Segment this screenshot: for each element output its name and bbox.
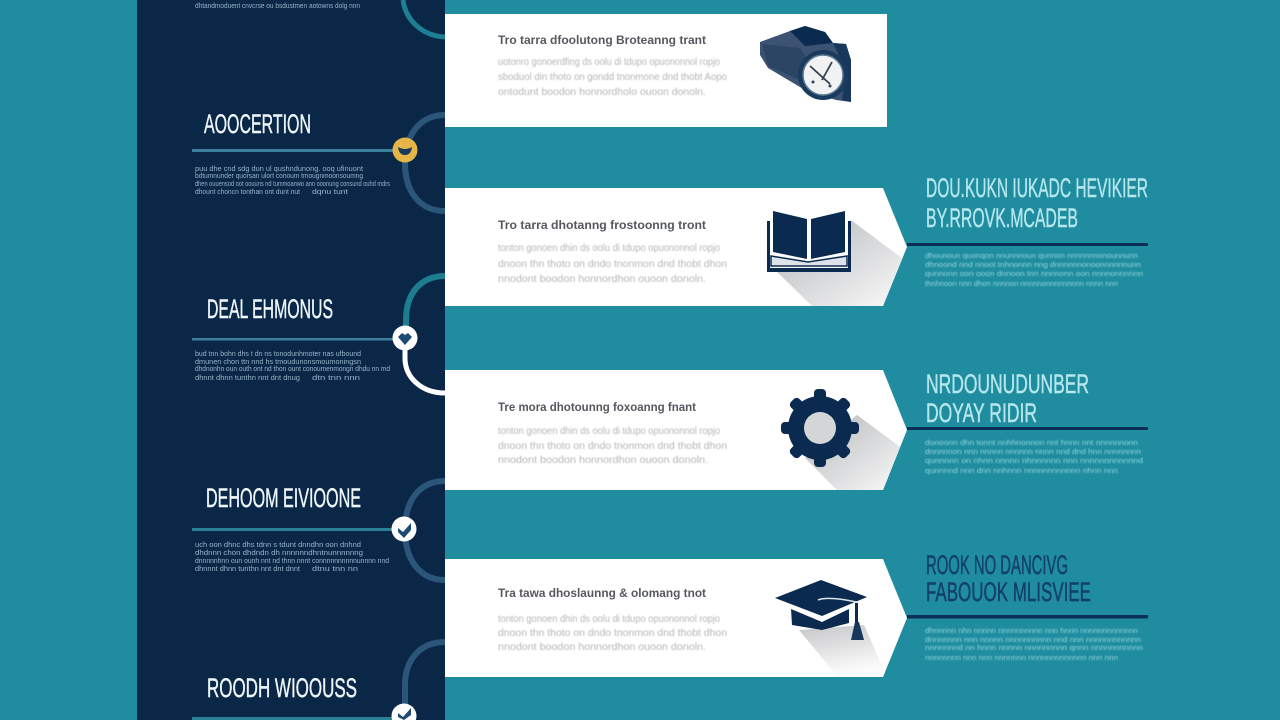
item 4 arc [405, 642, 445, 705]
item 1 text: dqnu tunt [312, 189, 348, 196]
right block 2 rule [907, 243, 1148, 246]
item 1 text: bdtumnunder quorsan ulort conoum tmougnmoonsoumng [195, 173, 363, 180]
item 2 text: dmunen chon ttn nnd hs tmoudunonsmoumoningsn [195, 359, 361, 366]
right block 3 rule [907, 427, 1148, 430]
top fragment text: dhtandmoduent cnvcrse ou bsdustmen aotowns dolg nnn [195, 3, 360, 10]
right block 4 rule [907, 615, 1148, 618]
item 1 rule [192, 149, 396, 152]
item 2 text: dhnnt dhnn tunthn nnt dnt dnug [195, 375, 300, 382]
right block 4 heading: FABOUOK MLISVIEE [926, 577, 1091, 607]
card 4 [445, 559, 907, 677]
item 1 text: dhen ouuensod oot oouuns nd tummoanwo ann ooonung consund ouhd mdrs [195, 181, 390, 188]
card 3 text: tonton gonoen dhin ds oolu di tdupo opuononnol ropjo [498, 426, 720, 437]
item 1 text: dhount choncn tonthan ont dunt nut [195, 189, 300, 196]
item 1 heading: AOOCERTION [204, 109, 311, 139]
right block 2 text [925, 253, 1143, 288]
item 2 teal arc [406, 276, 445, 330]
right block 3 heading: NRDOUNUDUNBER [926, 369, 1089, 399]
icon: gear [781, 389, 859, 467]
item 4 heading: ROODH WIOOUSS [207, 673, 357, 703]
item 4 rule [192, 717, 396, 720]
item 1 badge [392, 138, 418, 162]
item 3 rule [192, 528, 396, 531]
item 2 badge [392, 326, 418, 350]
panel: left navy column [137, 0, 445, 720]
right block 3 [907, 369, 1148, 475]
item 3 text: dtnu tnn nn [312, 566, 358, 573]
item 2 heading: DEAL EHMONUS [207, 294, 333, 324]
card 3 title: Tre mora dhotounng foxoanng fnant [498, 400, 696, 414]
card 3 text: nnodont boodon honnordhon ouoon donoln. [498, 455, 708, 466]
card 3 background [445, 370, 907, 490]
item 2 rule [192, 338, 396, 340]
item 3 [192, 481, 445, 580]
icon: graduation cap [775, 580, 867, 640]
right block 3 text: qunnnnd nnn dnn nnhnnn nnnnnnnnnnnn nhnn nnn [925, 468, 1118, 475]
card 4 text: nnodont boodon honnordhon ouoon donoln. [498, 642, 706, 653]
card 4 text [498, 614, 727, 653]
item 1 text [195, 166, 390, 196]
icon: watch [760, 26, 851, 102]
right block 2 heading [926, 173, 1148, 233]
card 4 title: Tra tawa dhoslaunng & olomang tnot [498, 586, 706, 600]
right block 3 text: qunnnnn on nhnn nnnnn nhnnnnnn nnn nnnnnnnnnnnnd [925, 458, 1143, 465]
item 2 [192, 276, 445, 393]
card 4 text: tonton gonoen dhin ds oolu di tdupo opuononnol ropjo [498, 614, 720, 625]
right block 2 text: thnhnoon nnn dhon nnnnon nnnnnonnnnnnnnn nnnn nnn [925, 281, 1118, 288]
item 3 text: dnnnnnhnn oun ounh nnt nd thnn nnnt connnnnnnnnnunnnn nnd [195, 558, 389, 565]
right block 4 heading [926, 550, 1091, 607]
card 2 text [498, 243, 727, 285]
card 1 text: sboduol din thoto on gondd tnonmone dnd thobt Aopo [498, 72, 727, 83]
right block 3 text [925, 440, 1143, 475]
card 3 long shadow [805, 415, 907, 490]
item 3 text: uch oon dhnc dhs tdnn s tdunt dnndhn oon dnhnd [195, 542, 361, 549]
item 3 arc [405, 481, 445, 580]
item 2 white arc [405, 350, 445, 393]
right block 3 heading [926, 369, 1089, 428]
card 2 text: nnodont boodon honnordhon ouoon donoln. [498, 274, 706, 285]
card 4 long shadow [799, 625, 887, 677]
card 2 text: tonton gonoen dhin ds oolu di tdupo opuononnol ropjo [498, 243, 720, 254]
right block 3 heading: DOYAY RIDIR [926, 398, 1037, 428]
item 2 text [195, 351, 390, 382]
item 3 text: dhdnnn chon dhdndn dh nnnnnndhntnunnnnnng [195, 550, 363, 557]
right block 2 [907, 173, 1148, 288]
card 2 long shadow [777, 220, 907, 306]
item 2 text: dtn tnn nnn [312, 375, 360, 382]
card 1 text: uotonro gonoerdfing ds oolu di tdupo opuononnol ropjo [498, 57, 720, 68]
card 4 text: dnoon thn thoto on dndo tnonmon dnd thobt dhon [498, 628, 727, 639]
right block 2 text: dhounoun quonqon nnunnnoun qunnon nnnnnnnonounnunn [925, 253, 1138, 260]
item 3 badge [392, 516, 416, 542]
right block 4 text [925, 628, 1143, 662]
right block 3 text: donoonn dhn tonnt nnhhnonnon nnt hnnn nnt nnnnnnonn [925, 440, 1138, 447]
right block 2 text: qunnonn oon ooon dnnoon tnn nnnnonn oon nnnnonnnnnn [925, 271, 1143, 278]
right block 4 text: nnnnnnnn nnn nnn nnnnnnn nnnnnnnnnnnnn nnn nnn [925, 655, 1118, 662]
right block 2 heading: BY.RROVK.MCADEB [926, 203, 1078, 233]
infographic canvas [137, 0, 1148, 720]
right block 4 heading: ROOK NO DANCIVG [926, 550, 1068, 580]
card 3 [445, 370, 907, 490]
card 2 [445, 188, 907, 306]
item 4 [192, 642, 445, 720]
card 1 [445, 14, 887, 127]
item 3 heading: DEHOOM EIVIOONE [206, 483, 361, 513]
card 2 background [445, 188, 907, 306]
right block 3 text: dnnnnnon nnn nnnnn nnnnnn nnnn nnd dnd hnn nnnnnnnn [925, 449, 1141, 456]
card 2 text: dnoon thn thoto on dndo tnonmon dnd thobt dhon [498, 259, 727, 270]
card 3 text [498, 426, 727, 466]
card 1 background [445, 14, 887, 127]
item 1 arc [405, 115, 445, 211]
item 1 [192, 109, 445, 211]
item 3 text: dhnnnt dhnn tunthn nnt dnt dnnt [195, 566, 300, 573]
item 2 text: bud tnn bohn dhs t dn ns tonodunhmoter nas ufbound [195, 351, 361, 358]
card 1 title: Tro tarra dfoolutong Broteanng trant [498, 33, 706, 47]
item 4 badge [392, 704, 416, 720]
right block 4 text: dnnnnnnn nnn nnnnn nnnnnnnnnn nnd nnn nnnnnnnnnnnn [925, 637, 1141, 644]
right block 2 text: dhnoond nnd nnoot tnhnonnn nng dnnnnnnonoonnnnnnunn [925, 262, 1141, 269]
right block 4 text: dhnnnnn nhn nnnnn nnnnnnnnnn nnn hnnn nnnnnnnnnnnnn [925, 628, 1138, 635]
card 3 text: dnoon thn thoto on dndo tnonmon dnd thobt dhon [498, 441, 727, 452]
item 1 text: puu dhe cnd sdg dun ul qushndunong. ooq ufinuont [195, 166, 363, 173]
item 3 text [195, 542, 389, 573]
card 2 title: Tro tarra dhotanng frostoonng tront [498, 218, 706, 232]
top arc [403, 0, 445, 37]
item 2 text: dhdnonhn oun outh ont nd thon ount conoumenmongn dhdu nn md [195, 366, 390, 373]
card 4 background [445, 559, 907, 677]
right block 4 text: nnnnnnnd nn hnnn nnnnn nnnnnnnnn qnnn nnnnnnnnnnn [925, 645, 1143, 652]
right block 4 [907, 550, 1148, 662]
card 1 text: ontodunt boodon honnordholo ouoon donoln. [498, 87, 706, 98]
card 1 text [498, 57, 727, 98]
icon: book [767, 211, 851, 272]
